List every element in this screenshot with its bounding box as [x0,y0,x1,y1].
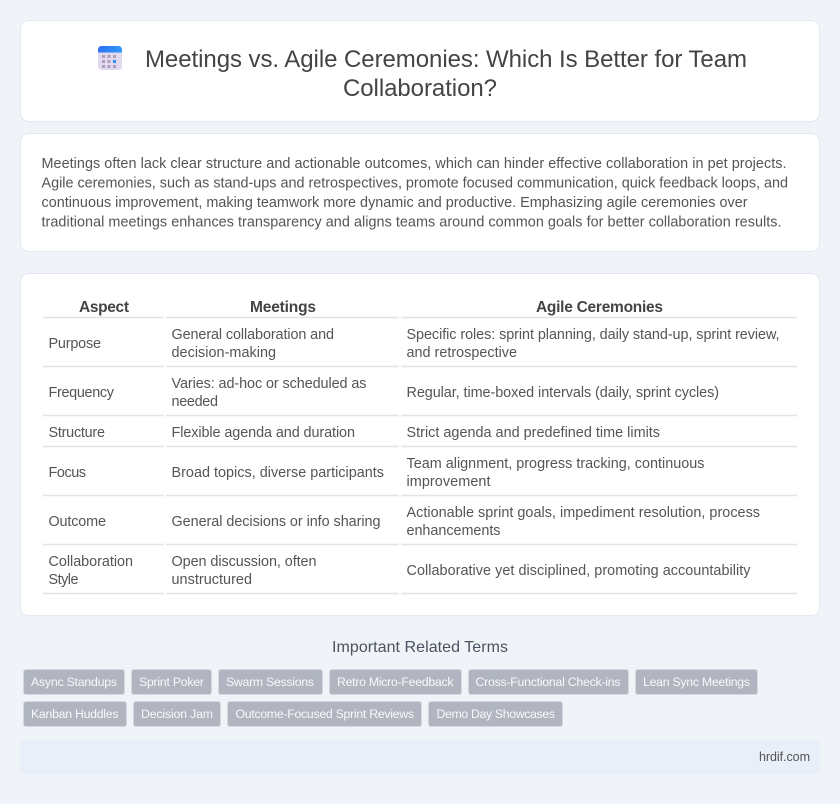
row: focus: Focus [48,465,86,481]
tag: Async Standups: Async Standups [31,675,117,689]
tag: Cross-Functional Check-ins [468,670,628,694]
row: frequency: Frequency [48,385,115,401]
row: structure: Strict agenda and predefined time limits [406,425,660,441]
tag: Swarm Sessions [218,670,322,694]
text block: introduction [42,156,788,230]
row: purpose: General collaboration and [172,327,334,343]
table header: Agile Ceremonies [536,299,663,316]
tag: Decision Jam: Decision Jam [141,707,213,721]
panel: title card [20,20,820,122]
row: outcome: Actionable sprint goals, impediment resolution, process [406,505,760,521]
footer: hrdif.com [759,750,810,764]
panel: introduction [20,134,820,252]
row: outcome: General decisions or info sharing [172,514,380,530]
row: focus: Team alignment, progress tracking, continuous [406,456,704,472]
tag: Retro Micro-Feedback: Retro Micro-Feedback [337,675,454,689]
row: frequency: Varies: ad-hoc or scheduled as [172,376,366,392]
tag: Retro Micro-Feedback [330,670,462,694]
title: Collaboration? [343,75,497,102]
row: frequency [48,376,719,410]
row: collaboration style: Open discussion, often [172,554,316,570]
tags: related terms [24,670,758,726]
row: purpose [48,327,780,361]
tag: Swarm Sessions: Swarm Sessions [226,675,314,689]
tag: Lean Sync Meetings [636,670,758,694]
tag: Lean Sync Meetings: Lean Sync Meetings [643,675,750,689]
tag: Decision Jam [134,702,220,726]
row: purpose: Specific roles: sprint planning, daily stand-up, sprint review, [406,327,780,343]
text block: introduction: Agile ceremonies, such as stand-ups and retrospectives, promote focused communication, quick feedback loops, and [42,176,788,192]
tag: Outcome-Focused Sprint Reviews: Outcome-Focused Sprint Reviews [236,707,414,721]
tag: Demo Day Showcases [428,702,562,726]
tag: Cross-Functional Check-ins: Cross-Functional Check-ins [476,675,620,689]
row: collaboration style: Collaboration [48,554,133,570]
row: outcome: Outcome [48,514,106,530]
row: frequency: Regular, time-boxed intervals (daily, sprint cycles) [406,385,719,401]
text block: introduction: traditional meetings enhances transparency and aligns teams around common goals for better collaboration results. [42,214,782,230]
heading: related terms: Important Related Terms [332,639,508,656]
icon: calendar [98,46,122,70]
tag: Demo Day Showcases: Demo Day Showcases [436,707,555,721]
row: collaboration style: Collaborative yet disciplined, promoting accountability [406,563,751,579]
row: outcome [48,505,760,539]
row: structure: Flexible agenda and duration [172,425,355,441]
table header [79,299,663,316]
title [145,46,747,102]
text block: introduction: Meetings often lack clear structure and actionable outcomes, which can hinder effective collaboration in pet projects. [42,156,786,172]
table header: Aspect [79,299,129,316]
text block: introduction: continuous improvement, making teamwork more dynamic and productive. Emphasizing agile ceremonies over [42,195,748,211]
row: frequency: needed [172,394,218,410]
row: structure: Structure [48,425,105,441]
tag: Kanban Huddles [24,702,126,726]
tag: Async Standups [24,670,124,694]
row: purpose: Purpose [48,336,101,352]
row: focus: Broad topics, diverse participants [172,465,384,481]
table header: Meetings [250,299,316,316]
panel: comparison table [20,274,820,616]
tag: Kanban Huddles: Kanban Huddles [31,707,118,721]
row: purpose: decision-making [172,345,276,361]
row: outcome: enhancements [406,523,500,539]
tag: Sprint Poker [132,670,212,694]
row: structure [48,425,660,441]
footer [20,740,820,774]
title: Meetings vs. Agile Ceremonies: Which Is Better for Team [145,46,747,73]
row: focus [48,456,704,490]
row: collaboration style [48,554,751,588]
row: purpose: and retrospective [406,345,517,361]
row: focus: improvement [406,474,490,490]
row: collaboration style: Style [48,572,78,588]
row: collaboration style: unstructured [172,572,252,588]
tag: Outcome-Focused Sprint Reviews [228,702,422,726]
tag: Sprint Poker: Sprint Poker [139,675,204,689]
